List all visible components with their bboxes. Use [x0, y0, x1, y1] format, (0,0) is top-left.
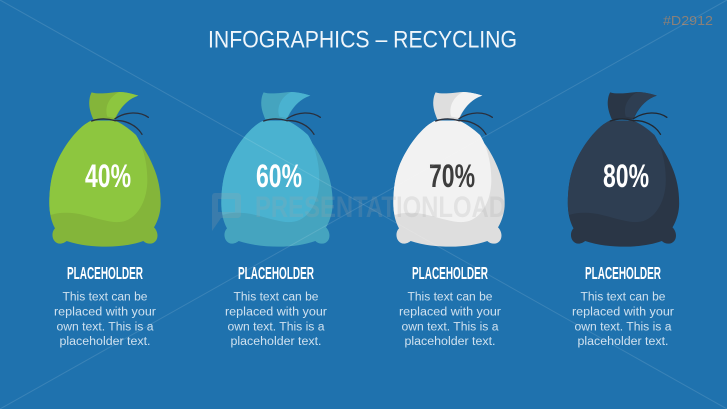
column 4 text: PLACEHOLDER — [585, 263, 661, 283]
watermark — [212, 191, 506, 231]
column 1 text: own text. This is a — [56, 322, 154, 334]
watermark: PRESENTATIONLOAD — [255, 191, 506, 224]
column 2 text: PLACEHOLDER — [238, 263, 314, 283]
icon: dark bag — [568, 92, 679, 247]
column 4 text: This text can be — [580, 292, 666, 304]
column 3 text — [399, 263, 501, 348]
column 3 text: placeholder text. — [404, 336, 496, 348]
column 2 text: placeholder text. — [230, 336, 322, 348]
percentage: 60%: 60% — [256, 158, 302, 194]
title: INFOGRAPHICS – RECYCLING — [208, 26, 517, 54]
column 2 text: This text can be — [234, 292, 318, 304]
column 1 text: placeholder text. — [60, 336, 150, 348]
column 2 text — [225, 263, 327, 348]
column 1 text: replaced with your — [54, 306, 156, 318]
icon: green bag — [49, 92, 161, 247]
column 1 text — [54, 263, 156, 348]
icon: white bag — [393, 92, 505, 247]
column 3 text: PLACEHOLDER — [412, 263, 488, 283]
column 3 text: This text can be — [408, 292, 492, 304]
column 4 text: own text. This is a — [574, 322, 672, 334]
column 1 text: PLACEHOLDER — [67, 263, 143, 283]
column 3 text: replaced with your — [399, 306, 501, 318]
column 4 text: placeholder text. — [578, 336, 668, 348]
percentage: 40%: 40% — [85, 158, 131, 194]
product code: #D2912 — [663, 13, 713, 28]
column 2 text: own text. This is a — [228, 322, 325, 334]
column 1 text: This text can be — [62, 292, 148, 304]
percentage: 80%: 80% — [603, 158, 649, 194]
column 2 text: replaced with your — [225, 306, 327, 318]
column 4 text — [572, 263, 674, 348]
column 3 text: own text. This is a — [402, 322, 499, 334]
column 4 text: replaced with your — [572, 306, 674, 318]
icon: teal bag — [221, 92, 333, 247]
percentage: 70%: 70% — [429, 158, 475, 194]
